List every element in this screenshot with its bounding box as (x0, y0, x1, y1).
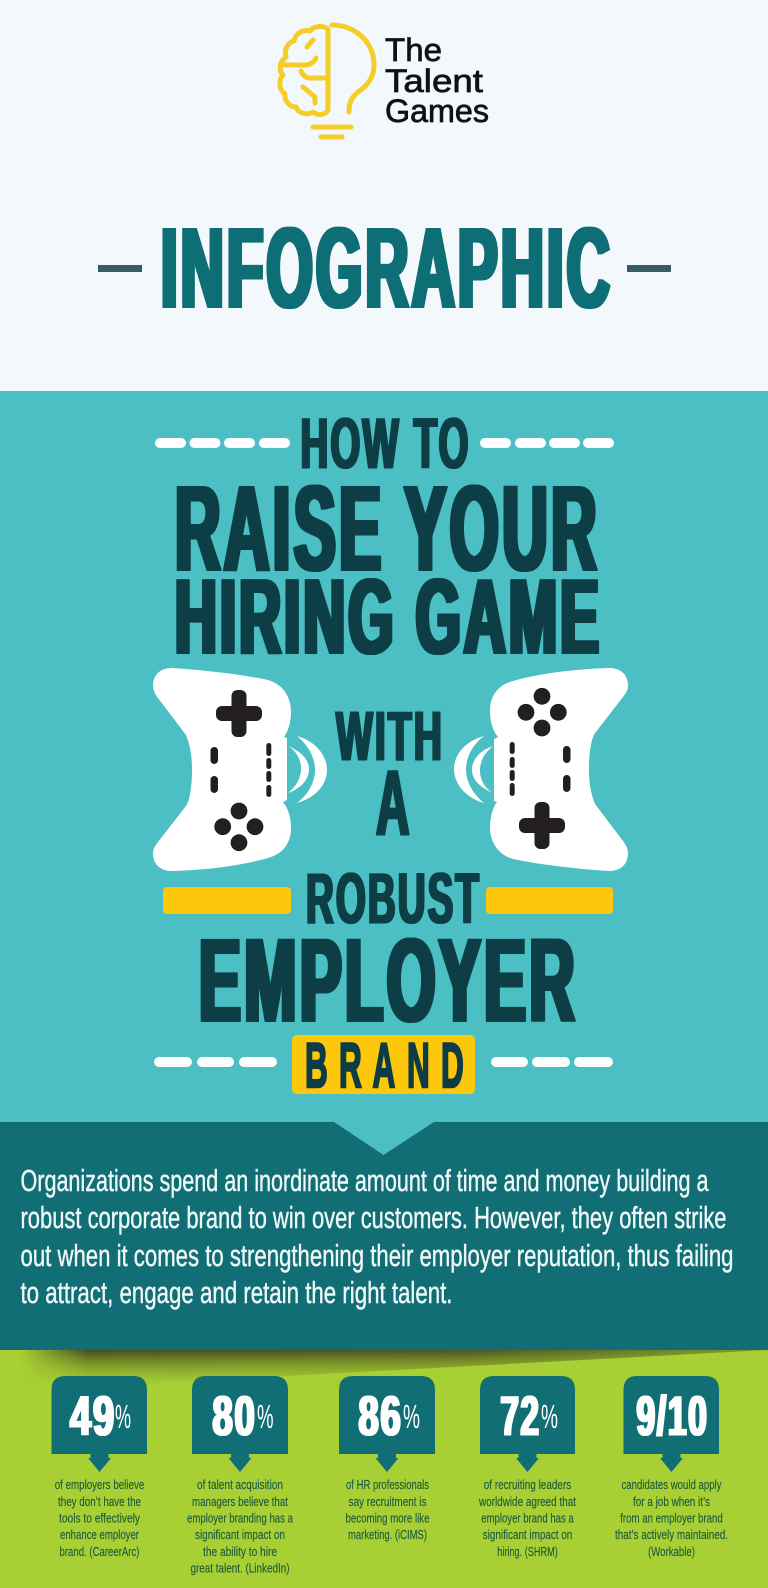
panel: header (0, 0, 768, 391)
stat card: 49%: 49 (70, 1384, 116, 1447)
stat text: brand. (CareerArc) (60, 1544, 140, 1559)
heading: how to: HOW TO (300, 405, 470, 484)
stat text: for a job when it’s (633, 1494, 710, 1509)
stat text: significant impact on (195, 1527, 285, 1542)
heading: robust (163, 860, 613, 939)
panel: headline (0, 391, 768, 1122)
stat text: employer brand has a (481, 1510, 574, 1526)
stat text: the ability to hire (203, 1544, 277, 1559)
stat text (187, 1477, 294, 1576)
stat text: becoming more like (346, 1510, 430, 1526)
stat card: 72% (478, 1376, 576, 1559)
stat text: great talent. (LinkedIn) (190, 1560, 290, 1576)
stat text: say recruitment is (348, 1494, 427, 1509)
stat text: significant impact on (483, 1527, 572, 1542)
stat text: (Workable) (648, 1544, 695, 1559)
stat card: 80%: % (257, 1398, 274, 1435)
panel: intro paragraph (0, 1122, 768, 1350)
heading: brand badge (154, 1030, 613, 1101)
text: intro (20, 1164, 734, 1310)
icon: right game controller (454, 668, 628, 871)
icon: brain light bulb (280, 25, 374, 137)
heading: brand badge: BRAND (305, 1030, 464, 1101)
stat card: 80%: 80 (212, 1384, 256, 1447)
stat text (55, 1477, 144, 1559)
stat text: hiring. (SHRM) (497, 1544, 558, 1559)
logo wordmark: Talent (385, 63, 483, 99)
stat text: of employers believe (55, 1477, 144, 1492)
stat card: 49% (52, 1376, 147, 1559)
stat text: employer branding has a (187, 1510, 294, 1526)
logo wordmark: Games (385, 93, 489, 129)
stat text: tools to effectively (59, 1510, 140, 1526)
heading: with: WITH (336, 697, 444, 775)
stat card: 9/10 (615, 1376, 728, 1559)
logo wordmark: The (385, 32, 442, 68)
stat text: of talent acquisition (197, 1477, 283, 1492)
stat text: candidates would apply (622, 1477, 722, 1492)
stat text: from an employer brand (620, 1510, 723, 1526)
stat card: 9/10: 9/10 (636, 1384, 708, 1447)
arrow: notch pointer (334, 1122, 434, 1155)
icon: left game controller (153, 668, 327, 871)
stat text (478, 1477, 576, 1559)
stat card: 86% (339, 1376, 435, 1542)
stat card: 49%: % (115, 1398, 131, 1435)
stat text: marketing. (iCIMS) (348, 1527, 427, 1542)
logo: The Talent Games (280, 25, 489, 137)
heading: how to (155, 405, 614, 484)
text: intro: to attract, engage and retain the right talent. (20, 1276, 452, 1310)
stat card: 72%: 72 (500, 1384, 540, 1447)
stat text: they don’t have the (58, 1494, 141, 1509)
stat text: managers believe that (192, 1494, 288, 1509)
stat text: worldwide agreed that (478, 1494, 576, 1509)
heading: robust: ROBUST (306, 860, 481, 939)
logo wordmark (385, 32, 489, 129)
stat card: 86%: 86 (358, 1384, 402, 1447)
stat text (615, 1477, 728, 1559)
stat card: 80% (187, 1376, 294, 1576)
panel: headline: A (376, 751, 412, 855)
stat text (346, 1477, 430, 1542)
stat card: 86%: % (403, 1398, 420, 1435)
stat text: of HR professionals (346, 1477, 429, 1492)
stat card: 72%: % (541, 1398, 558, 1435)
stat text: that’s actively maintained. (615, 1527, 728, 1542)
stat text: of recruiting leaders (484, 1477, 572, 1492)
stat text: enhance employer (60, 1527, 139, 1542)
panel: statistics (0, 1350, 768, 1588)
